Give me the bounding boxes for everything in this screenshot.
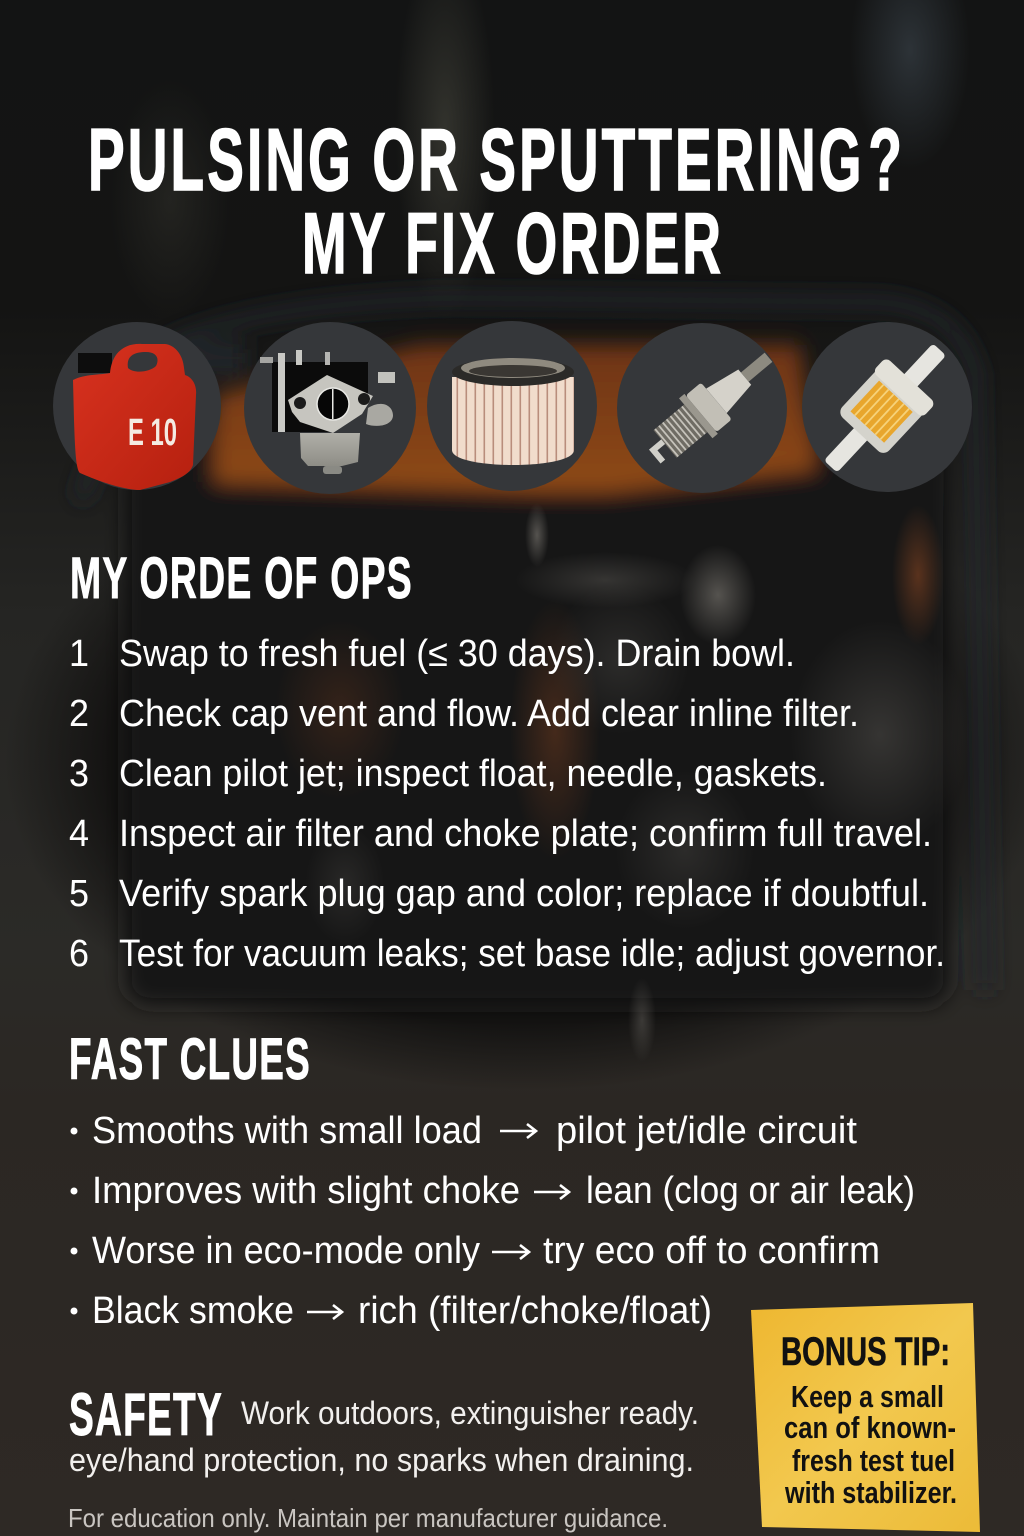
title: MY FIX ORDER bbox=[302, 196, 724, 292]
clue list bbox=[70, 1110, 915, 1332]
callout: bonus tip sticky note: with stabilizer. bbox=[784, 1475, 957, 1510]
clue list: try eco off to confirm bbox=[543, 1230, 880, 1272]
clue list: rich (filter/choke/float) bbox=[358, 1290, 712, 1332]
clue list: Smooths with small load bbox=[92, 1110, 482, 1152]
section: fast clues bbox=[69, 1027, 915, 1332]
callout: bonus tip sticky note bbox=[751, 1303, 980, 1532]
clue list: Worse in eco-mode only bbox=[92, 1230, 480, 1272]
numbered step list: Inspect air filter and choke plate; confirm full travel. bbox=[119, 813, 932, 855]
icon: E10 red fuel can bbox=[53, 322, 221, 490]
numbered step list: 3 bbox=[69, 753, 89, 795]
icon: E10 red fuel can: E 10 bbox=[128, 412, 177, 454]
footer disclaimer: For education only. Maintain per manufacturer guidance. bbox=[68, 1503, 668, 1533]
section: my order of ops bbox=[69, 546, 945, 975]
icon: spark plug bbox=[617, 323, 787, 493]
numbered step list: Check cap vent and flow. Add clear inline filter. bbox=[119, 693, 859, 735]
numbered step list: Swap to fresh fuel (≤ 30 days). Drain bowl. bbox=[119, 633, 795, 675]
clue list: Improves with slight choke bbox=[92, 1170, 520, 1212]
icon: carburetor bbox=[244, 322, 416, 494]
icon: air filter bbox=[427, 321, 597, 491]
heading: SAFETY bbox=[69, 1381, 223, 1448]
title bbox=[88, 110, 905, 292]
numbered step list: 1 bbox=[69, 633, 89, 675]
clue list: pilot jet/idle circuit bbox=[556, 1110, 857, 1152]
numbered step list: 5 bbox=[69, 873, 89, 915]
heading: MY ORDE OF OPS bbox=[70, 546, 413, 611]
icon row bbox=[53, 321, 972, 494]
numbered step list: Clean pilot jet; inspect float, needle, gaskets. bbox=[119, 753, 827, 795]
numbered step list: Test for vacuum leaks; set base idle; adjust governor. bbox=[119, 933, 945, 975]
callout: bonus tip sticky note: Keep a small bbox=[791, 1379, 944, 1414]
clue list: lean (clog or air leak) bbox=[586, 1170, 915, 1212]
numbered step list: Verify spark plug gap and color; replace if doubtful. bbox=[119, 873, 929, 915]
callout: bonus tip sticky note: can of known- bbox=[784, 1410, 956, 1445]
heading: FAST CLUES bbox=[69, 1027, 311, 1092]
numbered step list: 4 bbox=[69, 813, 89, 855]
numbered step list: 2 bbox=[69, 693, 89, 735]
numbered step list bbox=[69, 633, 945, 975]
numbered step list: 6 bbox=[69, 933, 89, 975]
callout: bonus tip sticky note: BONUS TIP: bbox=[781, 1330, 950, 1374]
callout: bonus tip sticky note: fresh test tuel bbox=[792, 1443, 955, 1478]
icon: inline fuel filter bbox=[802, 322, 972, 492]
section: safety bbox=[69, 1381, 699, 1478]
section: safety: eye/hand protection, no sparks when draining. bbox=[69, 1442, 694, 1478]
clue list: Black smoke bbox=[92, 1290, 294, 1332]
safety text: Work outdoors, extinguisher ready. bbox=[241, 1395, 699, 1431]
